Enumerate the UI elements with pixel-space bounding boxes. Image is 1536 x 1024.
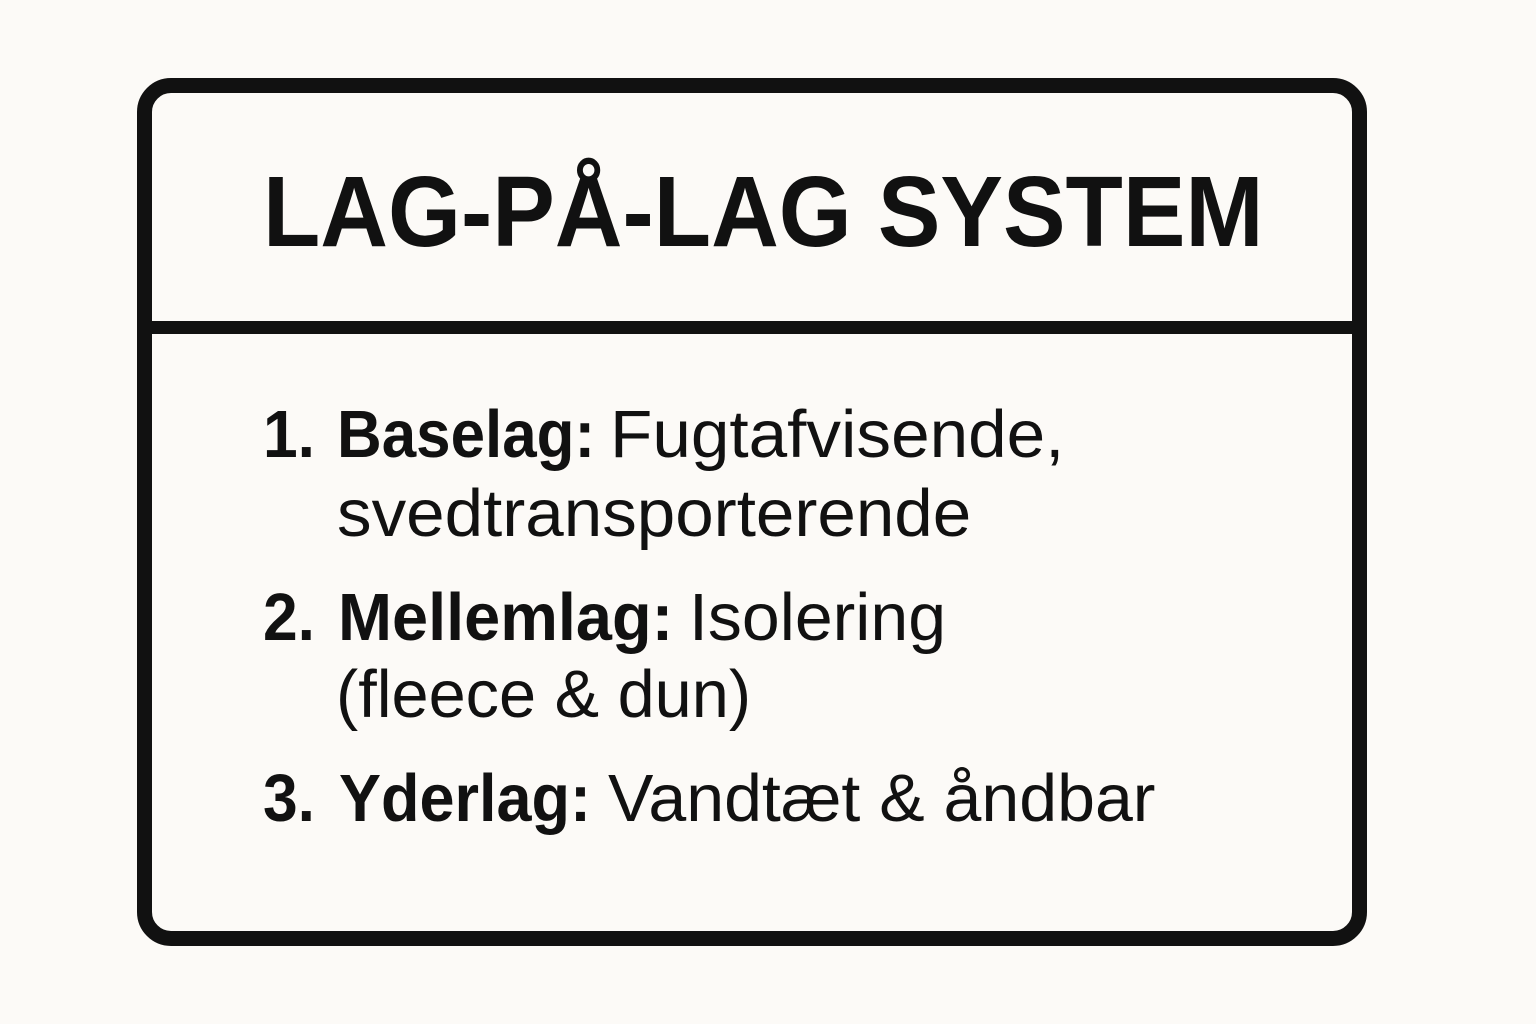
list item 2 first line: Isolering <box>689 580 946 655</box>
list item 3: 3. <box>263 761 315 836</box>
list item 3: Vandtæt & åndbar <box>608 761 1155 836</box>
list item 1 first line: 1. <box>263 397 315 472</box>
list item 2 first line: Mellemlag: <box>338 580 673 655</box>
list item 2 second line: (fleece & dun) <box>336 657 751 732</box>
list item 1 first line: Fugtafvisende, <box>610 397 1064 472</box>
list item 1 first line <box>263 397 1064 472</box>
list item 1 first line: Baselag: <box>337 397 595 472</box>
list item 2 first line: 2. <box>263 580 315 655</box>
list item 2 first line <box>263 580 946 655</box>
list item 3: Yderlag: <box>339 761 591 836</box>
title: LAG-PÅ-LAG SYSTEM <box>263 156 1264 268</box>
list item 1 second line: svedtransporterende <box>337 476 971 551</box>
panel: outer frame <box>137 78 1367 946</box>
list item 3 <box>263 761 1155 836</box>
